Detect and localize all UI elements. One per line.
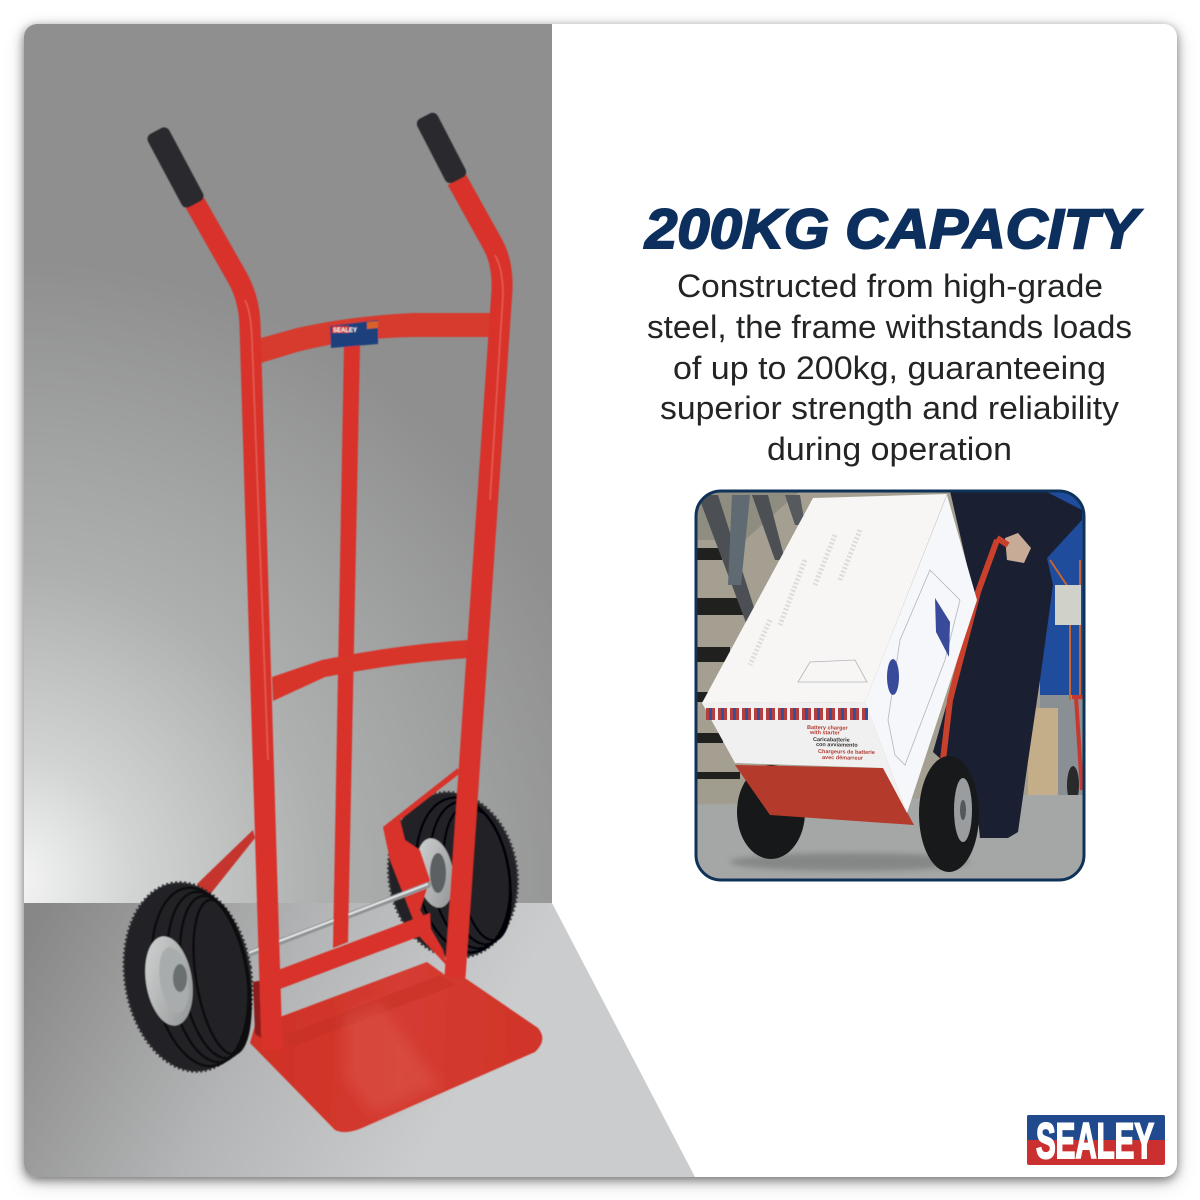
panel: product photo backdrop [24, 24, 695, 1177]
description text: steel, the frame withstands loads [647, 309, 1132, 345]
right tube [455, 180, 502, 977]
description text: Constructed from high-grade [677, 268, 1103, 304]
photo border [696, 491, 1084, 880]
description text: during operation [767, 431, 1012, 467]
truck handle [943, 538, 1008, 760]
logo blue band [1027, 1115, 1165, 1140]
floor [696, 795, 1084, 880]
description text [647, 268, 1132, 467]
photo: truck in use: con avviamento [816, 742, 858, 749]
floor [24, 903, 695, 1177]
shelving and boxes [1028, 560, 1084, 804]
front wheel [919, 756, 979, 872]
brand logo [1027, 1113, 1165, 1169]
right wheel [377, 783, 529, 967]
photo: truck in use: with starter [809, 730, 841, 737]
rear wheel [737, 765, 805, 859]
frame label: SEALEY [333, 328, 357, 334]
centre upright [333, 345, 360, 948]
blue back wall [1040, 491, 1084, 701]
left wheel [111, 873, 265, 1081]
top crossbar [261, 313, 492, 363]
hand [1005, 533, 1031, 563]
right tube highlight [490, 255, 503, 500]
right wheel bracket [383, 768, 459, 966]
middle crossbar [272, 640, 468, 701]
heading: 200KG CAPACITY [644, 197, 1143, 260]
right grip [415, 111, 468, 185]
box outline art [798, 570, 960, 765]
box top face [702, 494, 947, 703]
frame label [330, 320, 378, 348]
photo: truck in use: Caricabatterie [813, 737, 850, 744]
left tube [195, 203, 272, 1050]
lower crossbar [278, 913, 431, 989]
box right face [865, 495, 977, 813]
sack truck illustration [111, 111, 542, 1132]
plate fold shadow [283, 975, 455, 1048]
axle [243, 884, 428, 956]
truck base [735, 765, 914, 825]
base plate [250, 962, 542, 1132]
logo red base [1027, 1115, 1165, 1165]
left grip [145, 125, 206, 210]
description text: of up to 200kg, guaranteeing [673, 350, 1106, 386]
photo: truck in use: avec démarreur [822, 755, 864, 762]
photo: truck in use [696, 491, 1084, 880]
staircase [698, 492, 804, 779]
wall [24, 24, 552, 904]
warehouse wall [698, 492, 1040, 805]
box label text: Battery charger [807, 725, 849, 732]
worker [933, 491, 1082, 838]
plate reflections [345, 1003, 440, 1113]
floor shadow [730, 853, 970, 871]
lower back wall [1040, 695, 1084, 795]
box blue panel [935, 598, 950, 657]
frame stop [253, 980, 265, 1040]
description text: superior strength and reliability [660, 390, 1119, 426]
left tube highlight [245, 300, 268, 760]
box stripe [706, 708, 868, 720]
box front face [702, 702, 907, 813]
photo: truck in use: Chargeurs de batterie [818, 749, 875, 756]
box blue badge [887, 659, 899, 695]
left wheel bracket [197, 830, 255, 904]
box top print [750, 530, 860, 665]
